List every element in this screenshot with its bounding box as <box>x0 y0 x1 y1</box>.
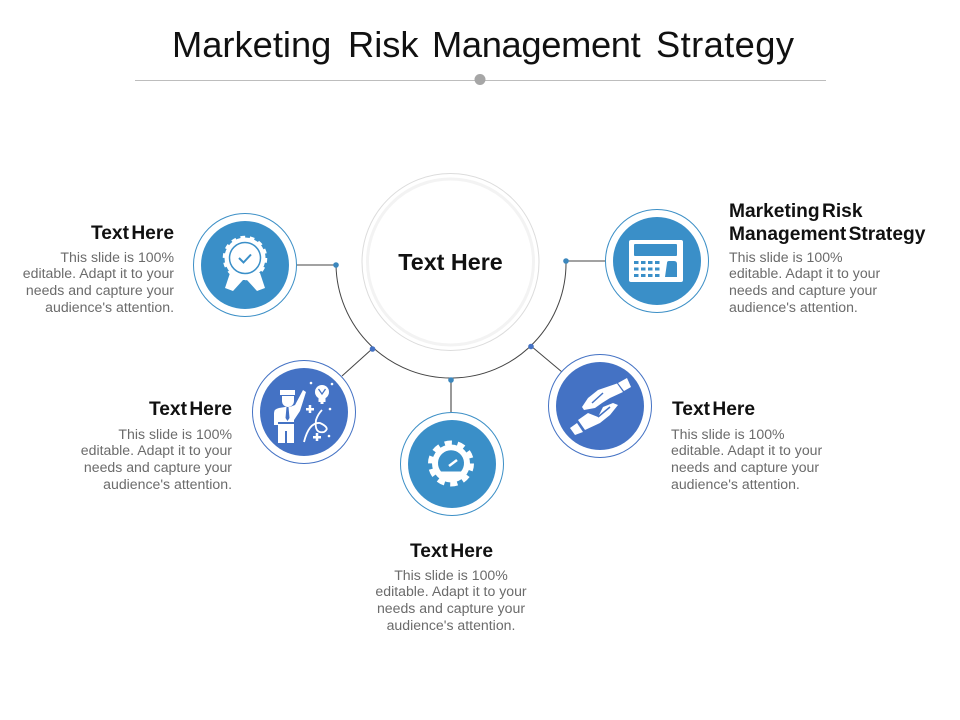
text block: left top: Text Here <box>91 223 174 244</box>
icon circle: innovation person <box>252 360 356 464</box>
icon circle: alarm keypad <box>606 210 708 312</box>
text block: bottom centre: Text Here <box>410 541 493 562</box>
title: Management <box>432 24 641 65</box>
title: Marketing <box>172 24 331 65</box>
icon circle: award ribbon <box>194 214 296 316</box>
title: Strategy <box>656 24 795 65</box>
icon circle: hands <box>548 354 652 458</box>
text block: bottom centre: This slide is 100% <box>394 567 508 583</box>
text block: left middle: Text Here <box>149 399 232 420</box>
text block: left middle: This slide is 100% <box>118 426 232 442</box>
text block: left middle: needs and capture your <box>84 459 232 475</box>
text block: right middle: This slide is 100% <box>671 426 785 442</box>
icon: two open hands <box>570 378 631 435</box>
icon: gear with speedometer <box>431 444 471 484</box>
central circle <box>362 174 539 350</box>
icon: keypad <box>629 240 683 282</box>
text block: right top: needs and capture your <box>729 282 877 298</box>
text block: right middle <box>671 399 823 492</box>
text block: right middle: editable. Adapt it to your <box>671 442 823 458</box>
text block: left top: This slide is 100% <box>60 249 174 265</box>
icon circle: gear gauge <box>400 412 504 516</box>
text block: right top: editable. Adapt it to your <box>729 265 881 281</box>
text block: right top <box>729 201 926 315</box>
text block: left top <box>23 223 174 315</box>
text block: bottom centre: editable. Adapt it to your <box>375 583 527 599</box>
connector arc with nodes <box>297 258 605 412</box>
text block: left top: needs and capture your <box>26 282 174 298</box>
icon: person with idea <box>274 382 333 443</box>
text block: right middle: needs and capture your <box>671 459 819 475</box>
text block: right top: Management Strategy <box>729 224 926 245</box>
text block: right middle: audience's attention. <box>671 476 800 492</box>
text block: bottom centre: audience's attention. <box>387 617 515 633</box>
text block: right top: audience's attention. <box>729 299 858 315</box>
text block: right top: This slide is 100% <box>729 249 843 265</box>
text block: bottom centre: needs and capture your <box>377 600 525 616</box>
text block: left middle: audience's attention. <box>103 476 232 492</box>
text block: left top: editable. Adapt it to your <box>23 265 174 281</box>
title divider with dot <box>135 74 826 85</box>
text block: right top: Marketing Risk <box>729 201 863 222</box>
central circle: Text Here <box>398 249 503 275</box>
text block: right middle: Text Here <box>672 399 755 420</box>
text block: bottom centre <box>375 541 527 633</box>
text block: left middle: editable. Adapt it to your <box>81 442 232 458</box>
title: Risk <box>348 24 419 65</box>
text block: left top: audience's attention. <box>45 299 174 315</box>
icon: award badge <box>224 238 266 291</box>
text block: left middle <box>81 399 232 492</box>
